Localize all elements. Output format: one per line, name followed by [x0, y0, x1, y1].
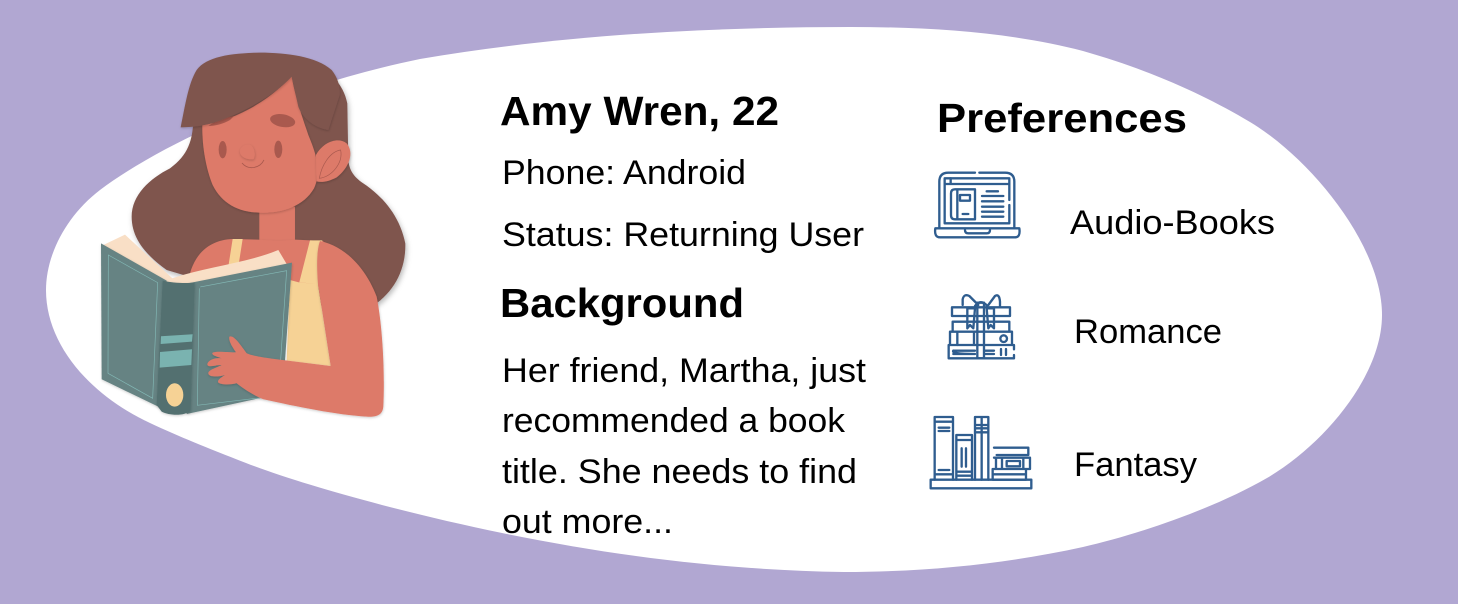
background paragraph — [502, 352, 867, 541]
nose — [240, 145, 255, 159]
spine dot — [166, 383, 183, 407]
cover lines — [108, 255, 287, 405]
romance label: Romance — [1074, 313, 1222, 351]
spine labels — [160, 334, 193, 368]
background paragraph: recommended a book — [502, 402, 846, 440]
icon: laptop e-book — [935, 173, 1020, 237]
book pages — [103, 235, 287, 285]
name heading: Amy Wren, 22 — [500, 88, 779, 134]
background paragraph: title. She needs to find — [502, 453, 857, 491]
long hair — [132, 63, 405, 307]
audio-books label: Audio-Books — [1070, 204, 1275, 242]
icon: bookshelf — [931, 417, 1031, 488]
background paragraph: out more... — [502, 503, 673, 541]
neck — [259, 207, 295, 247]
illustration: girl reading a book — [101, 53, 405, 417]
chest — [190, 239, 323, 293]
icon: gift-wrapped books — [949, 295, 1014, 358]
book left cover — [101, 243, 167, 408]
right eyebrow — [269, 112, 296, 129]
face — [202, 76, 318, 213]
mouth — [242, 160, 264, 168]
background heading: Background — [500, 280, 744, 326]
fringe — [181, 53, 340, 130]
arm and hand — [207, 241, 384, 417]
book right cover — [187, 263, 292, 414]
status: Status: Returning User — [502, 216, 864, 254]
fantasy label: Fantasy — [1074, 446, 1197, 484]
right eye — [274, 141, 282, 158]
ear — [316, 140, 350, 182]
eyes — [219, 141, 227, 158]
background paragraph: Her friend, Martha, just — [502, 352, 867, 390]
inner ear — [319, 150, 341, 178]
eyebrows — [208, 116, 234, 126]
phone: Phone: Android — [502, 154, 746, 192]
top — [228, 239, 331, 366]
book spine — [157, 281, 195, 415]
preferences heading: Preferences — [937, 95, 1187, 141]
